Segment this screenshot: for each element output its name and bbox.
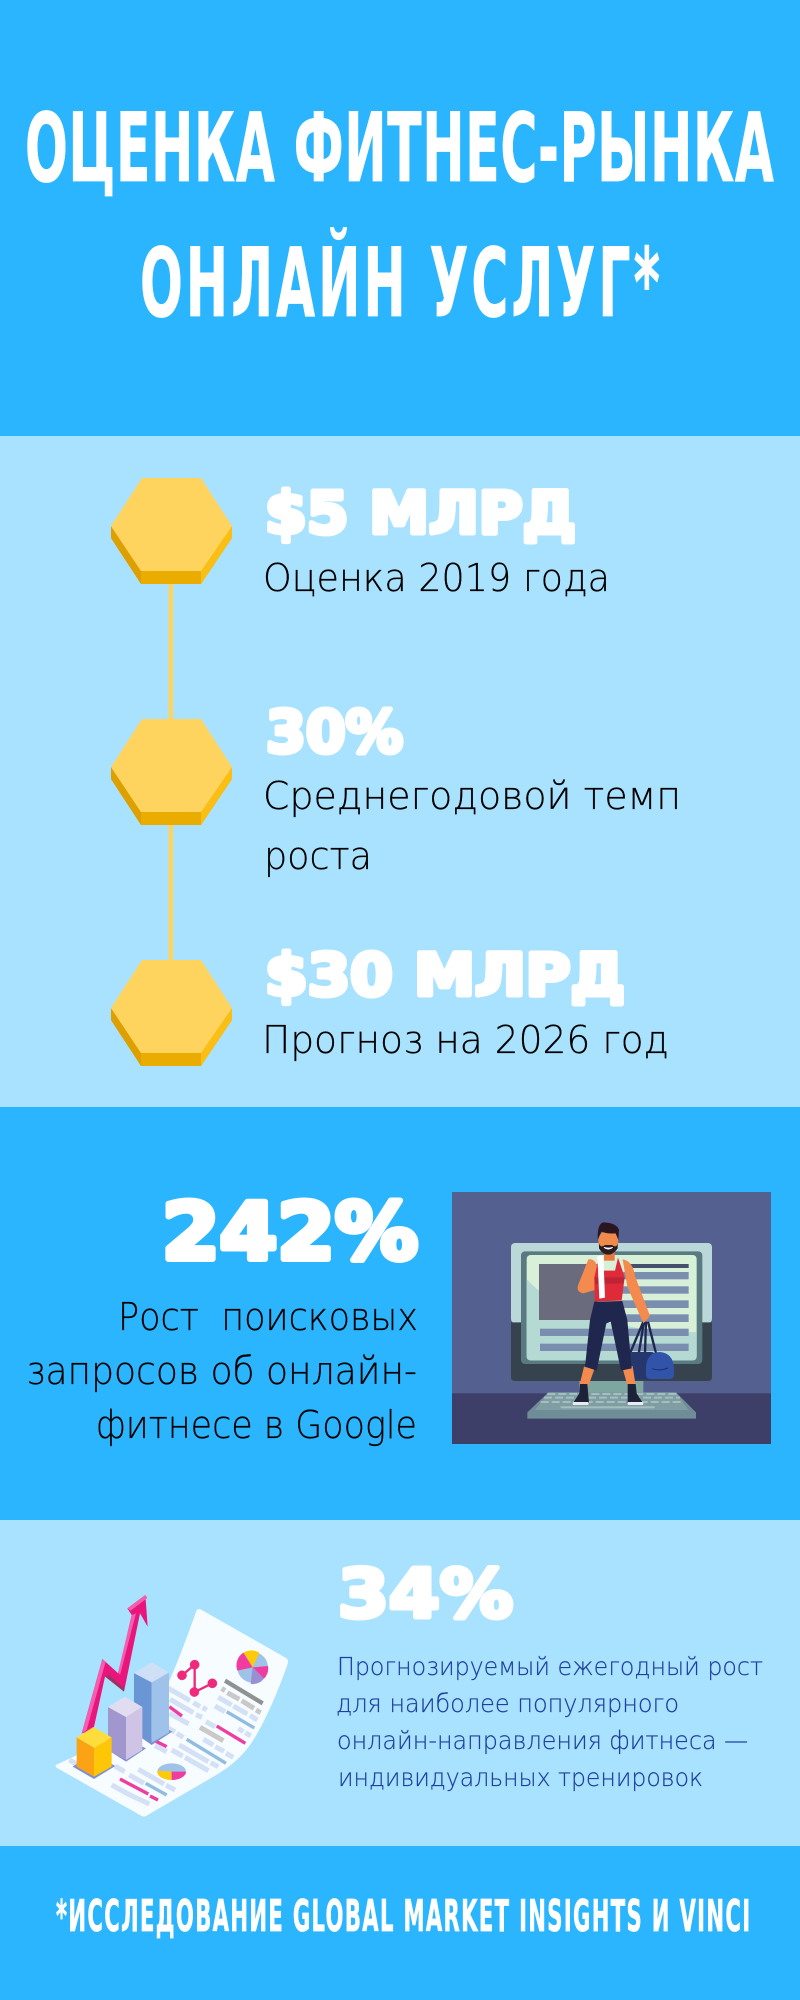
title: ОНЛАЙН УСЛУГ*: [140, 227, 660, 338]
panel: header: [0, 0, 800, 436]
source note: *ИССЛЕДОВАНИЕ GLOBAL MARKET INSIGHTS И VINCI: [56, 1891, 750, 1942]
stat: $30 billion: [262, 941, 669, 1062]
bag: [629, 1322, 674, 1379]
stat: $5 billion: Оценка 2019 года: [263, 556, 610, 600]
stat: 34%: 34%: [338, 1555, 513, 1633]
stat: $5 billion: $5 МЛРД: [265, 479, 576, 547]
network icon: [177, 1660, 217, 1697]
text: search growth description: [26, 1295, 418, 1447]
icon: hexagon 1: [111, 478, 232, 584]
stat: 30%: [263, 698, 681, 878]
stat: 30%: 30%: [266, 698, 403, 766]
title: ОЦЕНКА ФИТНЕС-РЫНКА: [25, 92, 774, 203]
panel: market stats: [0, 436, 800, 1107]
text: search growth description: фитнесе в Google: [96, 1403, 417, 1447]
text: search growth description: Рост поисковых: [118, 1295, 418, 1339]
stat: $5 billion: [263, 479, 610, 600]
text: individual training description: для наиболее популярного: [336, 1689, 679, 1718]
bar chart: [73, 1662, 172, 1779]
stat: 242%: 242%: [162, 1188, 418, 1278]
text: search growth description: запросов об онлайн-: [26, 1349, 417, 1393]
text: individual training description: Прогнозируемый ежегодный рост: [337, 1652, 763, 1681]
person: [573, 1222, 650, 1405]
panel: individual training: [0, 1520, 800, 1846]
text: individual training description: онлайн-направления фитнеса —: [337, 1726, 748, 1755]
small pie chart: [157, 1763, 186, 1780]
stat: 30%: роста: [264, 834, 372, 878]
title: [25, 92, 774, 338]
stat: $30 billion: Прогноз на 2026 год: [262, 1018, 669, 1062]
text: individual training description: [336, 1652, 763, 1792]
timeline connector: [168, 580, 173, 962]
text: individual training description: индивидуальных тренировок: [338, 1763, 703, 1792]
stat: $30 billion: $30 МЛРД: [265, 941, 625, 1009]
stat: 30%: Среднегодовой темп: [263, 774, 681, 818]
panel: search growth: [0, 1107, 800, 1520]
pie chart: [236, 1650, 268, 1684]
illustration: man in front of computer: [452, 1192, 771, 1444]
illustration: report with charts: [56, 1595, 288, 1817]
panel: footer: [0, 1846, 800, 2000]
icon: hexagon 2: [111, 719, 232, 825]
icon: hexagon 3: [111, 960, 232, 1066]
growth arrow: [82, 1595, 148, 1733]
